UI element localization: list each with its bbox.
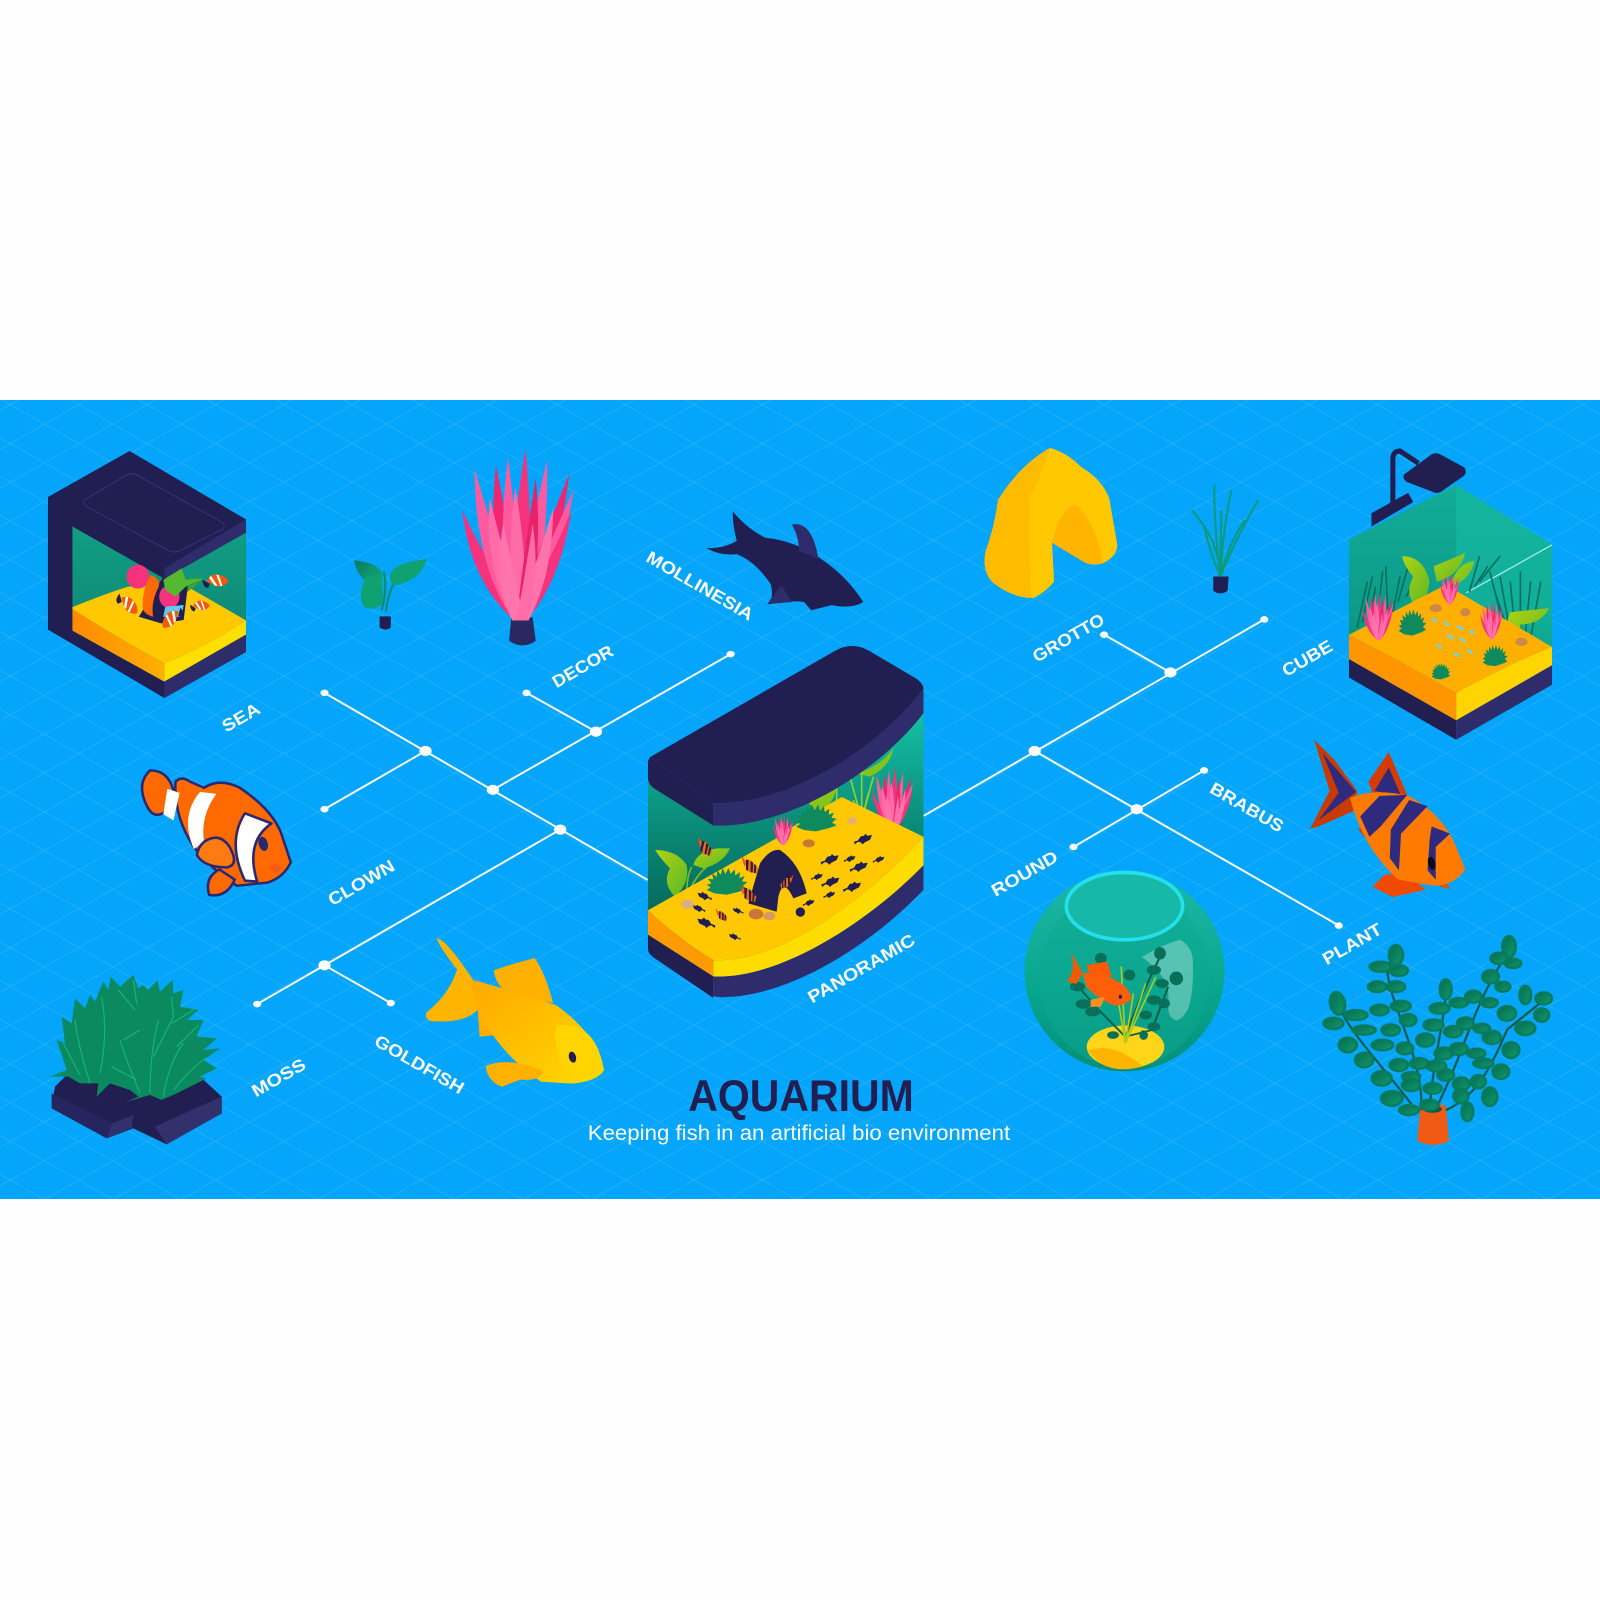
icon: brabus fish (1310, 740, 1465, 897)
icon: clownfish (142, 770, 291, 895)
tank: cube with lamp (1349, 451, 1552, 740)
label: goldfish: GOLDFISH (371, 1031, 468, 1098)
icon: potted plant (1324, 936, 1552, 1145)
bowl plant and goldfish (1067, 948, 1182, 1043)
tank: sea (48, 451, 246, 698)
label: decor: DECOR (548, 641, 617, 692)
label: grotto: GROTTO (1029, 609, 1108, 666)
subtitle: Keeping fish in an artificial bio environment (588, 1121, 1010, 1145)
cube leaves (1402, 553, 1549, 653)
icon: pink plant (462, 449, 573, 645)
connector network (253, 616, 1343, 1007)
label: round: ROUND (988, 846, 1061, 900)
icon: grotto (985, 448, 1117, 598)
label: clown: CLOWN (324, 856, 398, 910)
label: moss: MOSS (248, 1054, 309, 1101)
label: brabus: BRABUS (1207, 778, 1287, 836)
icon: mollinesia fish (706, 511, 863, 610)
label: panoramic: PANORAMIC (804, 929, 919, 1007)
icon: goldfish (426, 939, 604, 1087)
icon: sprout plant (354, 559, 427, 630)
sand contents: grotto, moss, fish (681, 805, 884, 940)
title: AQUARIUM (688, 1070, 914, 1121)
label: cube: CUBE (1278, 636, 1336, 681)
label: mollinesia: MOLLINESIA (643, 547, 758, 625)
tank contents: reef and clownfish (114, 565, 229, 629)
tank: panoramic (648, 646, 923, 998)
tank: round bowl (1024, 871, 1224, 1071)
label: sea: SEA (218, 698, 264, 736)
plant leaves (1324, 936, 1552, 1121)
aquarium plants behind sand (655, 748, 913, 897)
blue banner with isometric grid (0, 400, 1600, 1199)
label: plant: PLANT (1319, 919, 1386, 969)
icon: moss on rock (50, 975, 222, 1144)
icon: grass plant (1192, 485, 1258, 593)
